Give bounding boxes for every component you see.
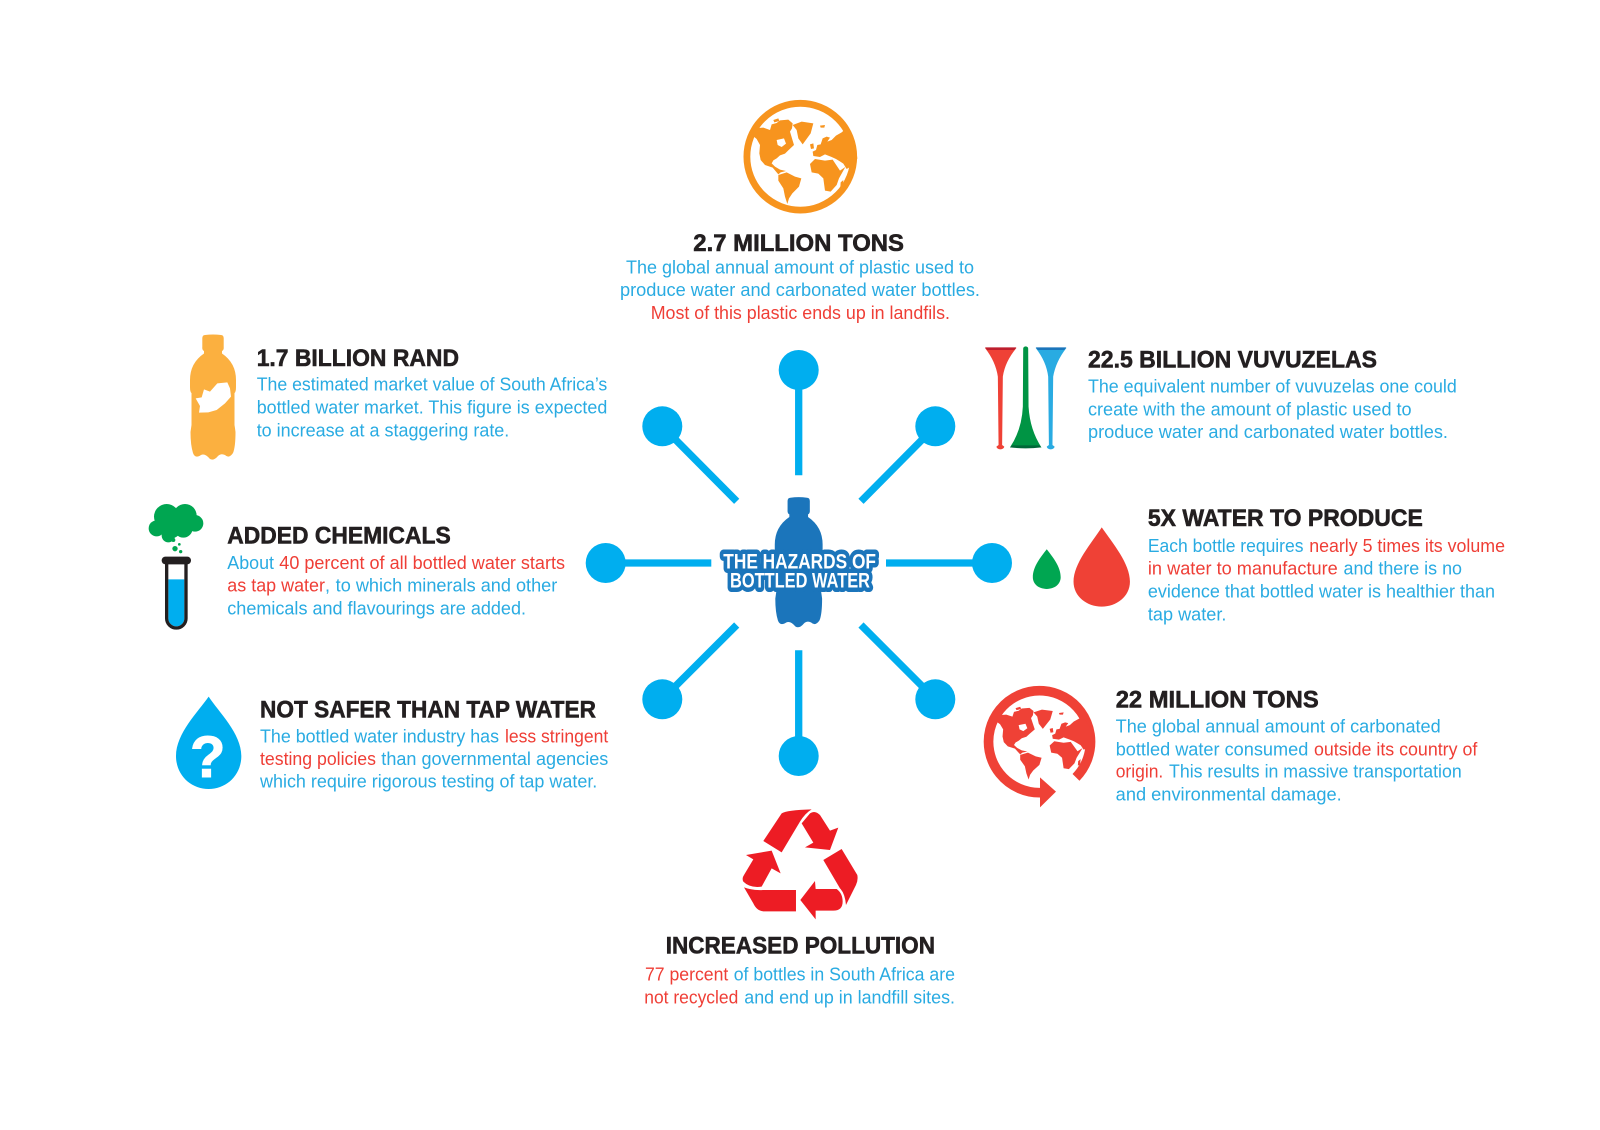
panel: 22 million tons: [989, 687, 1478, 807]
heading: NOT SAFER THAN TAP WATER: [260, 697, 596, 724]
body text: The global annual amount of carbonated: [1116, 716, 1441, 736]
body text: and end up in landfill sites.: [744, 987, 955, 1007]
body text: in water to manufacture: [1148, 559, 1338, 579]
spoke: top left: [642, 406, 737, 501]
central diagram: spokes and bottle: [586, 350, 1012, 776]
body text: [257, 375, 607, 440]
body text: [1088, 377, 1457, 442]
body text: evidence that bottled water is healthier than: [1148, 581, 1495, 601]
icon: three vuvuzelas: [985, 346, 1066, 449]
title: the hazards of bottled water: BOTTLED WATER: [730, 569, 870, 592]
body text: This results in massive transportation: [1169, 762, 1462, 782]
icon: small green drop and large red drop: [1033, 527, 1130, 607]
body text: bottled water market. This figure is expected: [257, 398, 607, 418]
heading: INCREASED POLLUTION: [666, 933, 935, 960]
body text: The equivalent number of vuvuzelas one could: [1088, 377, 1457, 397]
heading: 2.7 MILLION TONS: [693, 230, 904, 257]
body text: The bottled water industry has: [260, 726, 499, 746]
panel: increased pollution: [644, 809, 955, 1007]
icon: central bottle: [775, 497, 823, 627]
body text: to increase at a staggering rate.: [257, 420, 509, 440]
body text: not recycled: [644, 987, 738, 1007]
body text: ,: [325, 576, 330, 596]
body text: [644, 965, 955, 1007]
body text: produce water and carbonated water bottles.: [1088, 422, 1448, 442]
heading: ADDED CHEMICALS: [227, 523, 451, 550]
body text: and environmental damage.: [1116, 785, 1342, 805]
body text: Each bottle requires: [1148, 536, 1304, 556]
icon: red recycling arrows: [743, 809, 858, 919]
body text: produce water and carbonated water bottles.: [620, 280, 980, 300]
body text: bottled water consumed: [1116, 739, 1308, 759]
panel: not safer than tap water: [176, 697, 608, 792]
spoke: top: [779, 350, 819, 475]
body text: [227, 553, 565, 619]
body text: [1116, 716, 1478, 805]
heading: 22 MILLION TONS: [1116, 687, 1319, 714]
body text: About: [227, 553, 274, 573]
body text: [620, 257, 980, 323]
body text: as tap water: [227, 576, 325, 596]
body text: outside its country of: [1314, 739, 1478, 759]
body text: less stringent: [505, 726, 608, 746]
icon: orange bottle with South Africa: [190, 334, 236, 460]
spoke: bottom left: [642, 625, 737, 719]
body text: tap water.: [1148, 604, 1226, 624]
icon: test tube with green cloud: [149, 504, 203, 628]
heading: 22.5 BILLION VUVUZELAS: [1088, 347, 1377, 374]
spoke: left: [586, 543, 711, 583]
panel: 22.5 billion vuvuzelas: [985, 346, 1457, 449]
body text: The estimated market value of South Africa’s: [257, 375, 607, 395]
heading: 5X WATER TO PRODUCE: [1148, 505, 1423, 532]
body text: [1148, 536, 1505, 624]
panel: 2.7 million tons: [620, 103, 980, 323]
body text: origin.: [1116, 762, 1163, 782]
spoke: bottom right: [861, 625, 955, 719]
title: the hazards of bottled water: THE HAZARDS OF: [723, 550, 876, 573]
icon: blue drop with question mark: [176, 697, 241, 790]
body text: create with the amount of plastic used to: [1088, 399, 1412, 419]
title: the hazards of bottled water: [723, 550, 876, 592]
body text: The global annual amount of plastic used to: [626, 257, 974, 277]
body text: than governmental agencies: [381, 749, 608, 769]
icon: red globe with circular arrow: [989, 691, 1094, 807]
body text: which require rigorous testing of tap water.: [259, 772, 597, 792]
panel: 5x water to produce: [1033, 505, 1505, 624]
body text: of bottles in South Africa are: [734, 965, 955, 985]
body text: Most of this plastic ends up in landfils.: [651, 303, 950, 323]
panel: added chemicals: [149, 504, 565, 628]
body text: nearly 5 times its volume: [1309, 536, 1505, 556]
body text: [259, 726, 608, 792]
body text: and there is no: [1344, 559, 1462, 579]
spoke: bottom: [779, 650, 819, 776]
heading: 1.7 BILLION RAND: [257, 345, 459, 372]
body text: chemicals and flavourings are added.: [227, 599, 526, 619]
icon: orange globe: [747, 103, 857, 210]
body text: 77 percent: [645, 965, 728, 985]
body text: to which minerals and other: [336, 576, 557, 596]
body text: 40 percent of all bottled water starts: [279, 553, 565, 573]
spoke: top right: [861, 406, 955, 501]
body text: testing policies: [260, 749, 376, 769]
panel: 1.7 billion rand: [190, 334, 607, 460]
spoke: right: [886, 543, 1012, 583]
icon: blue drop with question mark: ?: [190, 725, 225, 790]
